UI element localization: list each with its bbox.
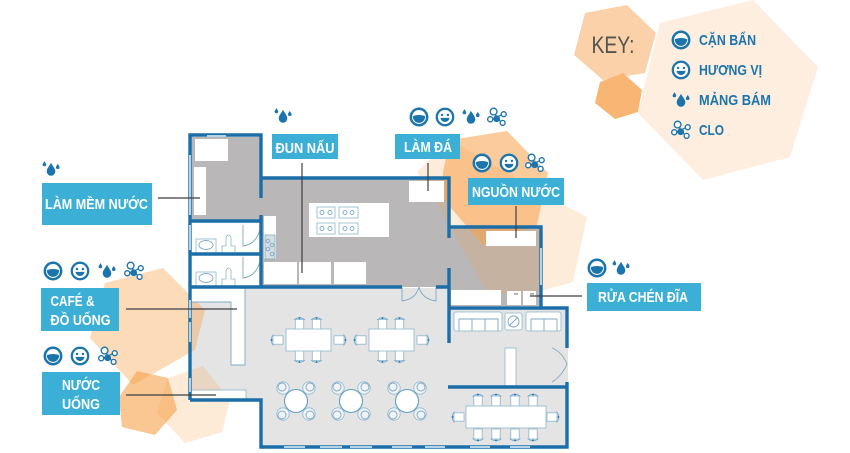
icons: softening [43, 161, 60, 176]
label: dishwashing: RỬA CHÉN ĐĨA [598, 288, 688, 306]
label: drinking water: NƯỚC [62, 376, 100, 394]
bathrooms [191, 222, 261, 287]
key title: KEY: [592, 32, 634, 59]
dining tables [271, 317, 429, 420]
key hexagon: title [574, 5, 656, 80]
orange hexagon: left dark [119, 371, 177, 435]
floor base [191, 137, 568, 447]
key row: scale: MẢNG BÁM [699, 92, 771, 109]
label: ice: LÀM ĐÁ [404, 139, 452, 156]
walls [190, 135, 567, 447]
label: water source [468, 178, 564, 205]
dining floor [191, 288, 568, 447]
label: softening [42, 183, 152, 225]
icons: drinking water [45, 347, 117, 364]
conference table [452, 394, 559, 441]
kitchen island with burners [309, 203, 389, 237]
icons: cafe and drinks [45, 262, 143, 279]
bathroom fixtures [196, 225, 261, 286]
label: dishwashing [587, 283, 701, 311]
label: drinking water: UỐNG [62, 395, 100, 413]
gray service rooms [191, 137, 541, 306]
label: softening: LÀM MỀM NƯỚC [45, 195, 148, 213]
key row: flavor: HƯƠNG VỊ [699, 62, 762, 79]
cafe counter [191, 288, 246, 399]
lounge seating [454, 312, 561, 386]
label: water source: NGUỒN NƯỚC [472, 183, 560, 201]
orange hexagon: left large [90, 268, 205, 385]
key row: scale [673, 92, 771, 109]
orange hexagon: centre pale [417, 140, 587, 297]
icons: cooking [275, 108, 292, 123]
icons: dishwashing [589, 260, 630, 276]
label: cafe and drinks: ĐỒ UỐNG [50, 311, 110, 329]
floor plan furniture [191, 139, 567, 441]
icons: ice [411, 108, 506, 125]
storage fixtures [194, 139, 228, 215]
doors [402, 287, 567, 382]
key row: chlorine [672, 121, 724, 139]
label: drinking water [42, 372, 120, 415]
label: cooking: ĐUN NẤU [276, 140, 334, 157]
key hexagon: dark [595, 73, 642, 119]
label: cafe and drinks: CAFÉ & [50, 293, 95, 310]
key row: sediment [673, 31, 756, 49]
label: cafe and drinks [41, 288, 119, 331]
orange hexagon: centre dark [443, 131, 548, 245]
ice machine and water source fixtures [409, 181, 536, 305]
key row: flavor [673, 62, 762, 79]
orange hexagon: left pale [157, 366, 230, 443]
icons: water source [474, 154, 544, 171]
label: cooking [272, 134, 338, 159]
key hexagon: pale [638, 0, 818, 180]
key row: sediment: CẶN BẨN [699, 31, 756, 49]
key row: chlorine: CLO [699, 122, 724, 139]
leader lines [126, 163, 582, 395]
kitchen counters [264, 216, 366, 284]
label: ice [395, 134, 460, 159]
